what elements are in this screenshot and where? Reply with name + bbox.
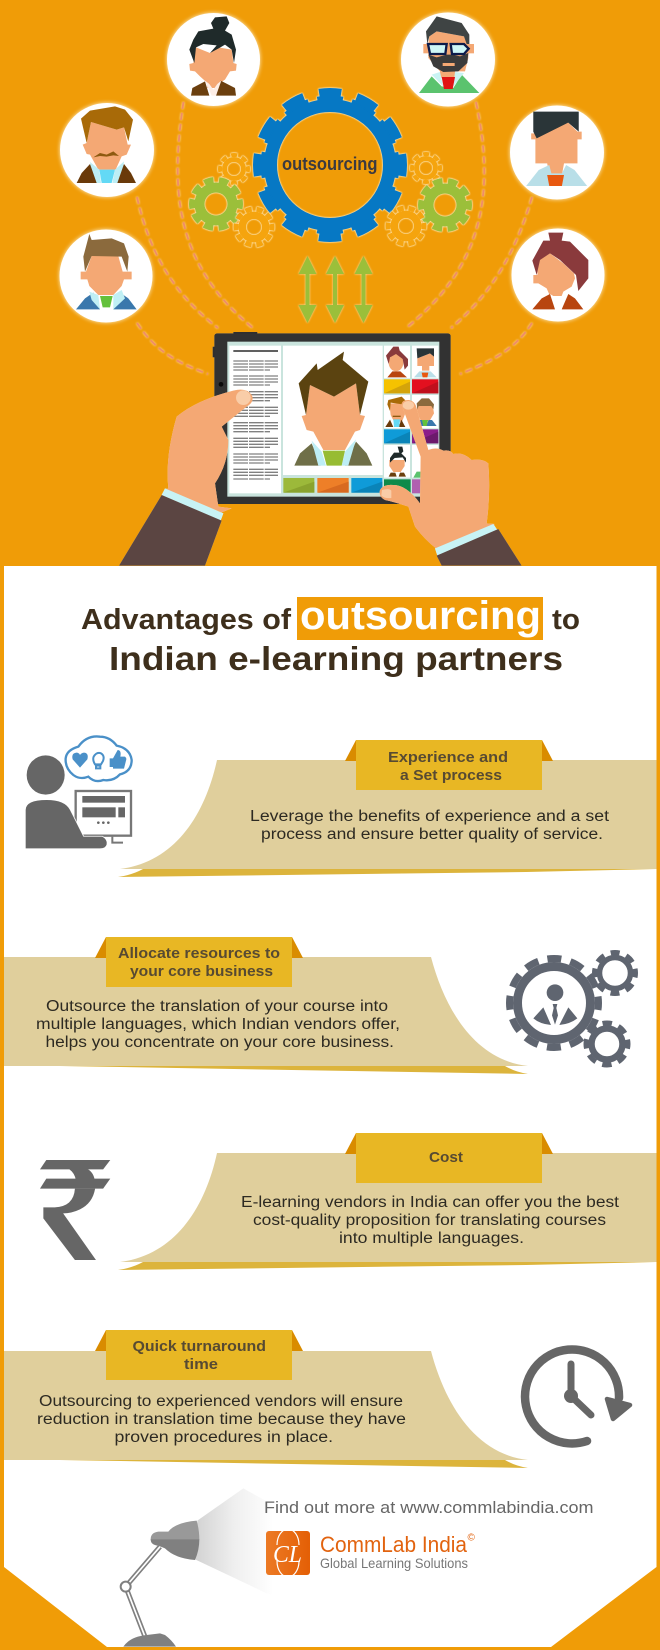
panel ribbon	[118, 869, 656, 877]
body text: E-learning vendors in India can offer you the best	[241, 1194, 620, 1211]
avatar circle: woman with red hair	[512, 228, 604, 322]
heading tab: your core business	[130, 963, 273, 980]
footer link text: Find out more at www.commlabindia.com	[264, 1498, 594, 1517]
icon: desk lamp	[121, 1488, 273, 1647]
green gear left	[192, 180, 240, 228]
tablet screen	[227, 342, 439, 497]
heading tab: Cost	[429, 1149, 463, 1166]
panel ribbon	[60, 1066, 528, 1074]
central gears	[192, 93, 469, 245]
icon: person at computer with idea cloud	[26, 736, 132, 848]
tablet camera	[219, 382, 223, 387]
title line 2: Indian e-learning partners	[109, 640, 563, 677]
big blue gear	[258, 93, 402, 237]
body text: multiple languages, which Indian vendors offer,	[36, 1016, 400, 1033]
body text: proven procedures in place.	[114, 1429, 333, 1446]
small orange gear left top	[220, 155, 248, 183]
heading tab: a Set process	[400, 767, 502, 784]
body text: Leverage the benefits of experience and a set	[250, 808, 610, 825]
white content panel	[4, 566, 656, 1647]
heading tab: Allocate resources to	[118, 945, 280, 962]
icon: rupee symbol	[40, 1160, 110, 1260]
article text lines on screen	[233, 350, 278, 479]
body text: into multiple languages.	[339, 1230, 524, 1247]
avatar circle: man with dark hair and orange tie	[510, 106, 604, 200]
heading tab: time	[184, 1356, 218, 1373]
tablet with hands	[119, 332, 522, 566]
right hand	[380, 400, 522, 566]
heading tab: Experience and	[388, 749, 508, 766]
hero: outsourcing illustration	[60, 12, 604, 566]
panel: quick turnaround time	[4, 1330, 528, 1468]
avatar circle: bearded man with glasses	[401, 12, 495, 106]
left hand	[119, 390, 253, 566]
tablet body	[213, 332, 451, 504]
title	[81, 594, 580, 677]
body text: cost-quality proposition for translating courses	[253, 1212, 606, 1229]
orange gear right bottom	[388, 208, 424, 244]
avatar circle: man in blue jacket	[60, 230, 152, 322]
large avatar on screen	[294, 352, 372, 466]
title line 1	[81, 594, 580, 638]
title line 1: to	[552, 604, 580, 636]
logo tagline: Global Learning Solutions	[320, 1555, 468, 1571]
title line 1: Advantages of	[81, 604, 291, 636]
panel: cost	[118, 1133, 656, 1270]
double-headed arrows	[298, 256, 372, 323]
body text	[36, 998, 400, 1051]
body text: reduction in translation time because they have	[37, 1411, 406, 1428]
title highlight box	[297, 597, 543, 640]
panel: allocate resources	[4, 937, 528, 1074]
body text	[250, 808, 610, 843]
panel ribbon	[60, 1460, 528, 1468]
small avatars on screen	[385, 347, 437, 478]
avatar circle: man with moustache	[60, 103, 154, 197]
heading tab	[345, 1133, 553, 1183]
dashed connector lines	[137, 102, 532, 374]
title line 1: outsourcing	[300, 594, 541, 638]
orange gear left bottom	[236, 209, 272, 245]
heading tab	[345, 740, 553, 790]
body text: Outsourcing to experienced vendors will ensure	[39, 1393, 403, 1410]
small orange gear right top	[412, 154, 440, 182]
avatar circle: woman with bun	[167, 13, 260, 106]
body text: helps you concentrate on your core business.	[46, 1034, 394, 1051]
body text: process and ensure better quality of service.	[261, 826, 603, 843]
logo badge	[266, 1529, 310, 1577]
logo wordmark: CommLab India	[320, 1532, 468, 1557]
icon: clock with arrow	[525, 1349, 630, 1443]
panel: experience and a set process	[118, 740, 656, 877]
logo badge: CL	[273, 1542, 302, 1568]
body text	[37, 1393, 406, 1446]
heading tab	[95, 1330, 303, 1380]
gear label: outsourcing	[282, 154, 378, 174]
body text	[241, 1194, 620, 1247]
heading tab: Quick turnaround	[132, 1338, 266, 1355]
icon: gears with business person	[510, 952, 636, 1065]
copyright mark: ©	[468, 1532, 476, 1544]
heading tab	[95, 937, 303, 987]
coloured tiles on screen	[283, 379, 438, 493]
logo: CommLab India	[266, 1529, 476, 1577]
green gear right	[421, 181, 469, 229]
panel ribbon	[118, 1262, 656, 1270]
body text: Outsource the translation of your course into	[46, 998, 388, 1015]
